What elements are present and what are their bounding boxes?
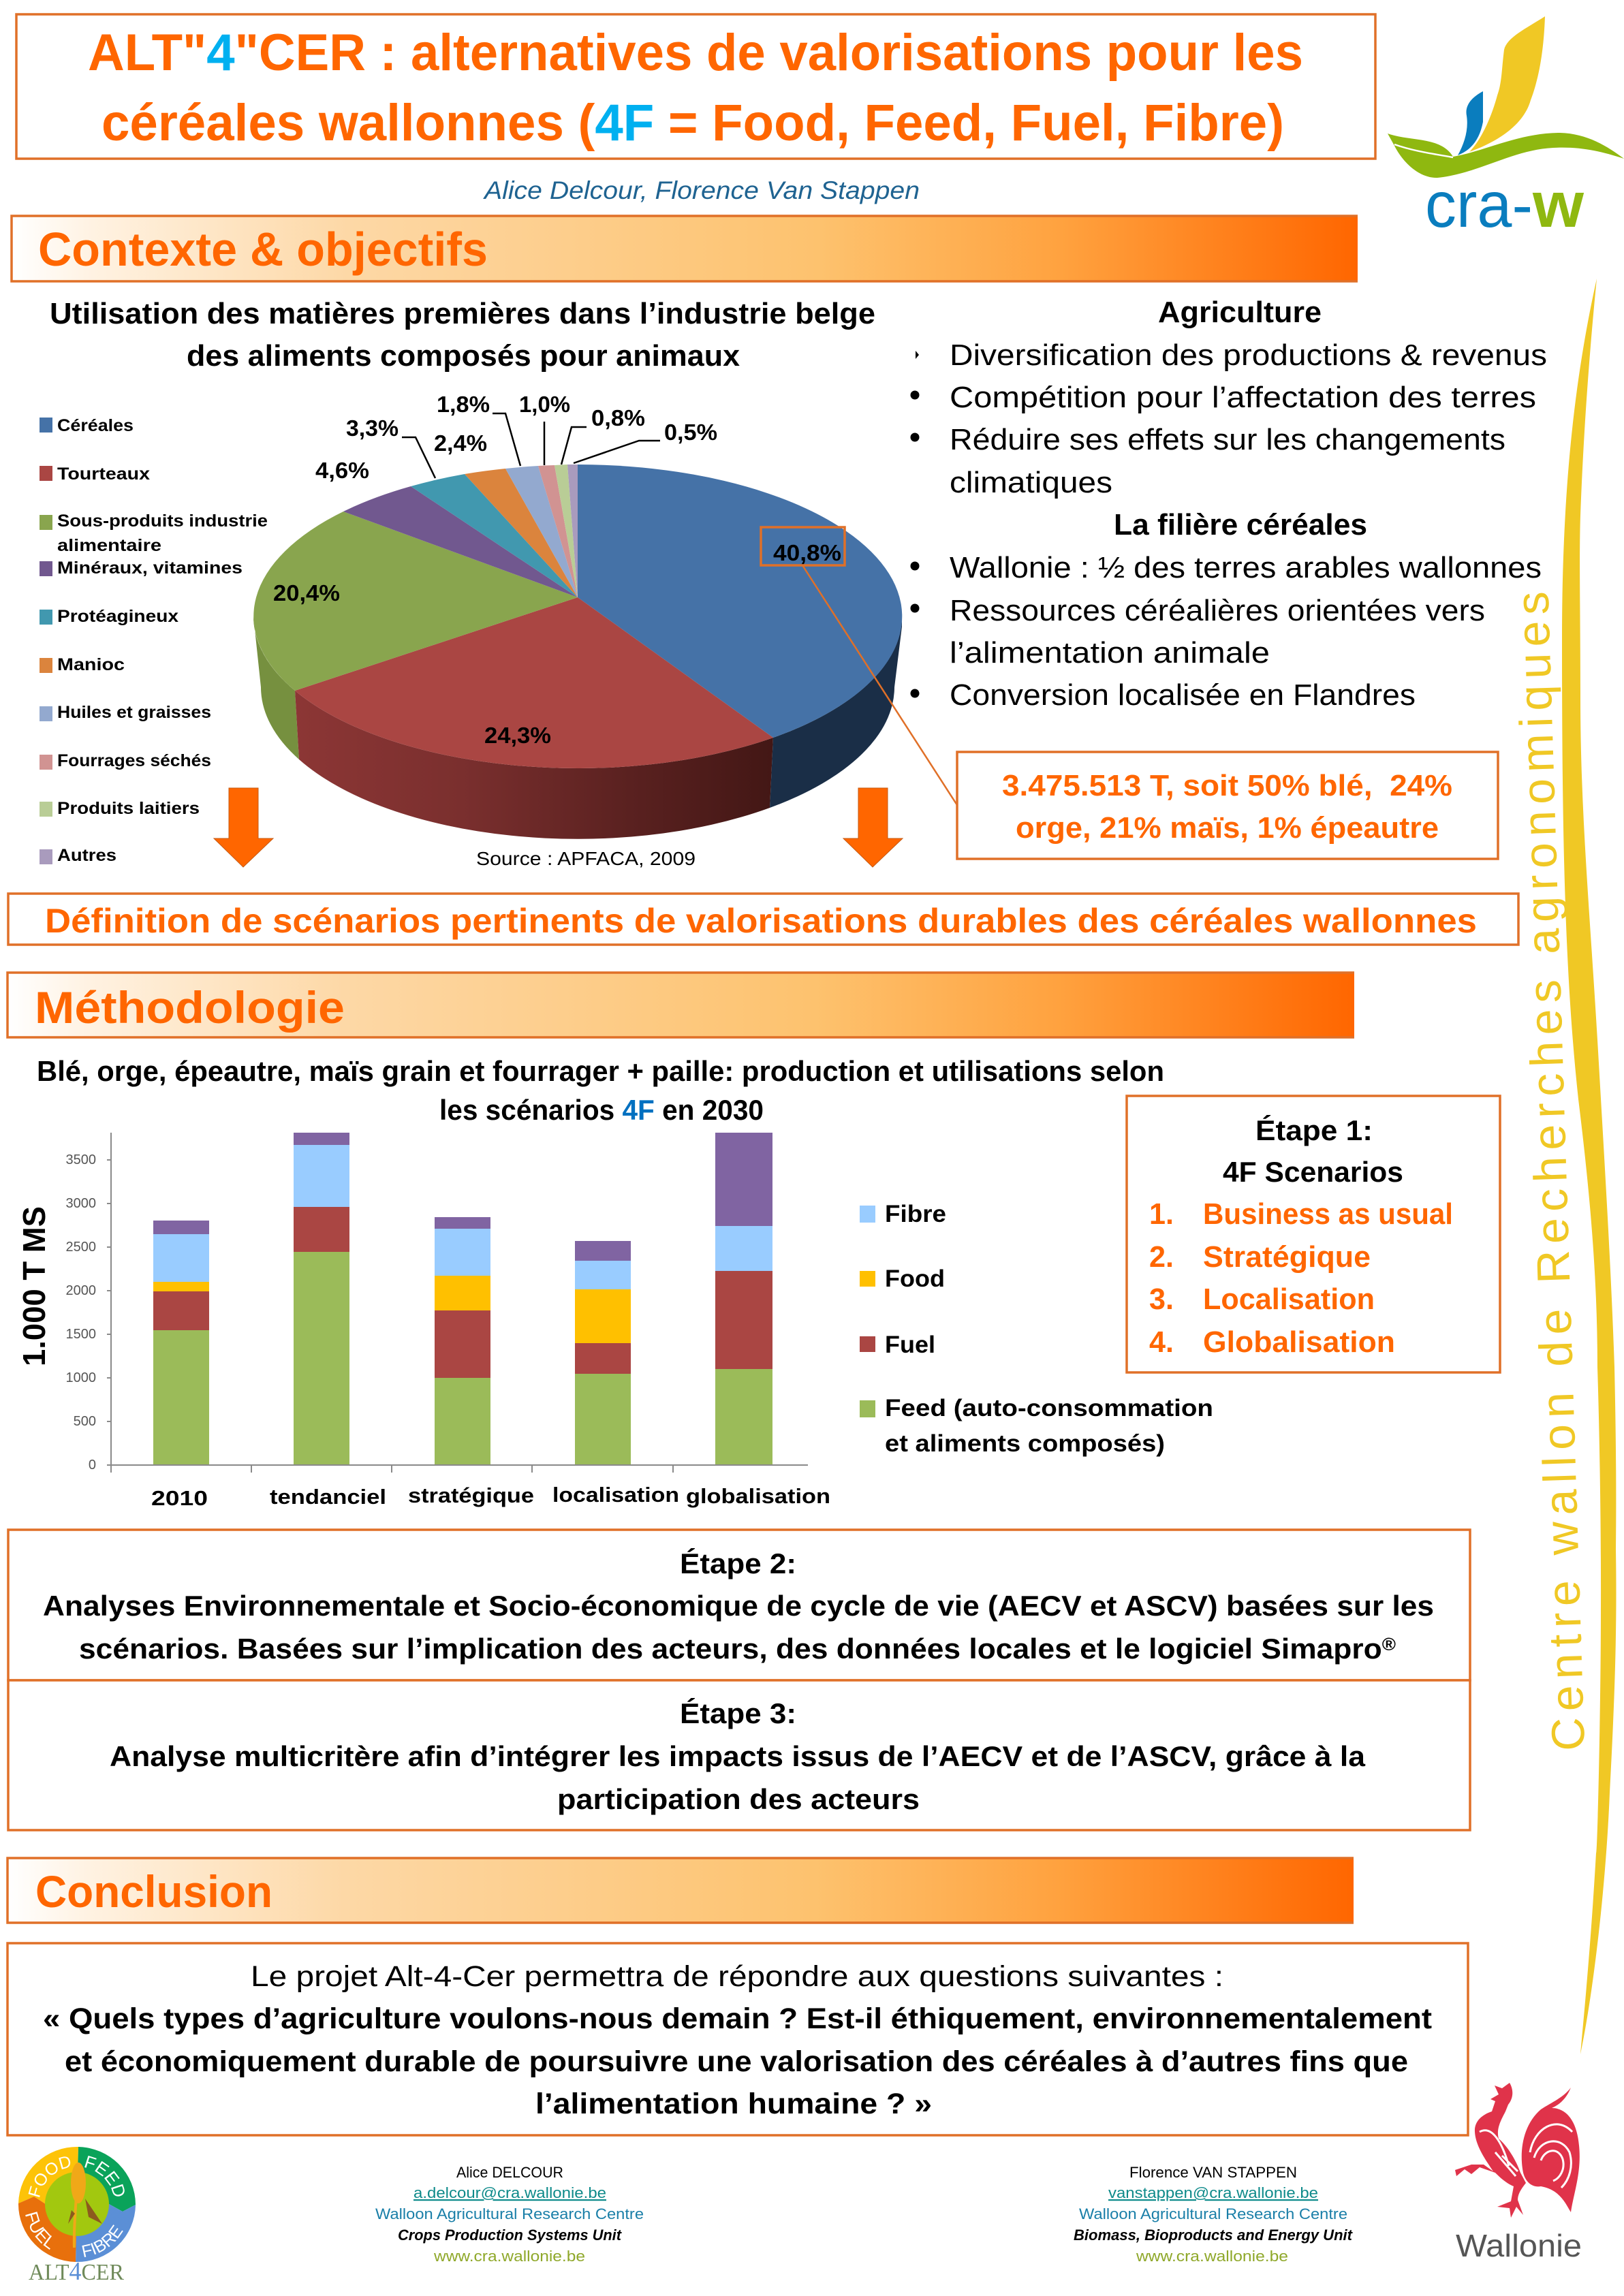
logo: alt4cer: FUEL bbox=[25, 2212, 52, 2250]
pie chart: 4,6% bbox=[315, 458, 369, 483]
pie legend: Fourrages séchés bbox=[57, 751, 211, 770]
panel: conclusion: et économiquement durable de poursuivre une valorisation des céréales à d’autres fins que bbox=[65, 2045, 1408, 2078]
panel: étape 3: participation des acteurs bbox=[557, 1783, 920, 1815]
text block: Agriculture: climatiques bbox=[950, 466, 1112, 499]
contact: Florence Van Stappen: www.cra.wallonie.be bbox=[1136, 2248, 1288, 2265]
arrow: connector to callout bbox=[802, 565, 957, 805]
pie legend: Produits laitiers bbox=[57, 799, 200, 818]
panel: étape 2: Étape 2: bbox=[680, 1547, 796, 1579]
panel: étape 1: Business as usual bbox=[1203, 1197, 1453, 1231]
x axis labels: stratégique bbox=[408, 1483, 534, 1507]
pie chart: 3,3% bbox=[346, 415, 399, 441]
highlight box: 40,8% bbox=[761, 527, 845, 565]
panel: étape 1: 2. bbox=[1149, 1240, 1174, 1274]
contact: Alice Delcour bbox=[375, 2164, 644, 2265]
bar chart legend: Feed (auto-consommation bbox=[885, 1395, 1213, 1421]
panel: étape 1: 4F Scenarios bbox=[1223, 1156, 1403, 1188]
logo: cra-w bbox=[1388, 16, 1624, 241]
section header: Méthodologie: Méthodologie bbox=[35, 982, 345, 1033]
panel: étape 1: 4. bbox=[1149, 1325, 1174, 1359]
definition banner: Définition de scénarios pertinents de valorisations durables des céréales wallonnes bbox=[45, 902, 1477, 940]
pie chart title bbox=[50, 297, 875, 373]
x axis labels: tendanciel bbox=[270, 1485, 386, 1509]
section header: Conclusion bbox=[7, 1858, 1354, 1923]
text block: Agriculture: Compétition pour l’affectation des terres bbox=[950, 381, 1536, 414]
bar chart legend: Fibre bbox=[885, 1201, 946, 1227]
panel: étape 2: Analyses Environnementale et Socio-économique de cycle de vie (AECV et ASCV) basées sur les bbox=[43, 1590, 1434, 1622]
section header: Méthodologie bbox=[7, 973, 1354, 1037]
pie chart bbox=[253, 392, 902, 839]
contact: Alice Delcour: Crops Production Systems Unit bbox=[398, 2227, 623, 2244]
pie legend: Manioc bbox=[57, 655, 125, 674]
y axis labels: 2000 bbox=[65, 1283, 96, 1298]
panel: étape 2: scénarios. Basées sur l’implication des acteurs, des données locales et le logiciel Simapro bbox=[79, 1633, 1313, 1665]
bars: 2010 bbox=[153, 1221, 209, 1465]
vertical label: Centre wallon de Recherches agronomiques: Centre wallon de Recherches agronomiques bbox=[1507, 591, 1595, 1752]
x axis labels: localisation bbox=[552, 1483, 679, 1507]
panel: étape 1 bbox=[1127, 1096, 1500, 1372]
panel: conclusion bbox=[7, 1943, 1468, 2135]
text block: La filière céréales bbox=[910, 508, 1542, 712]
pie legend: Minéraux, vitamines bbox=[57, 559, 243, 578]
contact: Florence Van Stappen: Florence VAN STAPPEN bbox=[1129, 2164, 1297, 2181]
contact: Florence Van Stappen bbox=[1074, 2164, 1354, 2265]
pie chart title: des aliments composés pour animaux bbox=[187, 339, 740, 373]
contact: Alice Delcour: a.delcour@cra.wallonie.be bbox=[413, 2184, 606, 2201]
text block: Agriculture bbox=[910, 296, 1547, 499]
x axis labels: 2010 bbox=[151, 1486, 208, 1510]
y axis labels: 1000 bbox=[65, 1370, 96, 1385]
title box bbox=[16, 14, 1375, 159]
text block: La filière céréales: Ressources céréalières orientées vers bbox=[950, 594, 1485, 627]
title box: ALT"4"CER : alternatives de valorisations pour les bbox=[88, 24, 1303, 82]
arrow: left down bbox=[214, 788, 273, 867]
panel: étape 3: Étape 3: bbox=[680, 1697, 796, 1729]
logo: Wallonie rooster bbox=[1455, 2083, 1580, 2218]
pie chart: 0,5% bbox=[664, 420, 717, 445]
contact: Florence Van Stappen: vanstappen@cra.wallonie.be bbox=[1108, 2184, 1318, 2201]
text block: La filière céréales: La filière céréales bbox=[1114, 508, 1367, 541]
logo: cra-w: cra- bbox=[1425, 169, 1533, 241]
pie chart title: Utilisation des matières premières dans l’industrie belge bbox=[50, 297, 875, 330]
bar chart legend: et aliments composés) bbox=[885, 1430, 1165, 1457]
contact: Alice Delcour: Alice DELCOUR bbox=[456, 2164, 563, 2181]
logo: alt4cer: FOOD bbox=[29, 2156, 71, 2197]
bars: tendanciel bbox=[294, 1133, 349, 1465]
wordmark: Wallonie: Wallonie bbox=[1456, 2228, 1582, 2263]
arrow: right down bbox=[843, 788, 903, 867]
y axis labels: 1500 bbox=[65, 1327, 96, 1342]
pie legend: alimentaire bbox=[57, 536, 161, 555]
logo: alt4cer: ALT4CER bbox=[29, 2257, 124, 2286]
text block: Agriculture: Réduire ses effets sur les changements bbox=[950, 423, 1505, 456]
callout: cereal tonnage bbox=[957, 752, 1498, 859]
pie chart: 2,4% bbox=[434, 430, 487, 456]
text block: Agriculture: Diversification des productions & revenus bbox=[950, 339, 1547, 372]
panel: étape 3: Analyse multicritère afin d’intégrer les impacts issus de l’AECV et de l’ASCV, grâce à la bbox=[110, 1740, 1366, 1772]
y axis labels: 3000 bbox=[65, 1196, 96, 1211]
x axis labels bbox=[151, 1483, 830, 1510]
text block: La filière céréales: Conversion localisée en Flandres bbox=[950, 678, 1416, 712]
logo: alt4cer: FEED bbox=[84, 2156, 125, 2197]
title box: céréales wallonnes (4F = Food, Feed, Fuel, Fibre) bbox=[102, 94, 1284, 152]
pie chart: 24,3% bbox=[484, 723, 551, 748]
bar chart title bbox=[37, 1055, 1164, 1126]
panel: étape 1: Stratégique bbox=[1203, 1240, 1371, 1274]
panel: étape 1: Localisation bbox=[1203, 1283, 1375, 1316]
y axis labels: 3500 bbox=[65, 1152, 96, 1167]
pie legend: Tourteaux bbox=[57, 465, 150, 484]
source: Source : APFACA, 2009 bbox=[476, 848, 696, 869]
logo: alt4cer bbox=[18, 2147, 136, 2286]
y axis labels: 2500 bbox=[65, 1240, 96, 1255]
bars: globalisation bbox=[715, 1133, 772, 1465]
y axis labels: 0 bbox=[89, 1458, 96, 1473]
pie legend: Sous-produits industrie bbox=[57, 512, 268, 531]
pie chart: 40,8% bbox=[773, 540, 841, 565]
y axis title: 1.000 T MS bbox=[16, 1206, 52, 1366]
contact: Alice Delcour: Walloon Agricultural Research Centre bbox=[375, 2205, 644, 2222]
pie chart: 20,4% bbox=[273, 580, 340, 606]
y axis labels bbox=[65, 1152, 96, 1473]
bar chart legend bbox=[860, 1201, 1213, 1457]
x axis labels: globalisation bbox=[686, 1484, 830, 1508]
text block: Agriculture: Agriculture bbox=[1158, 296, 1322, 329]
panel: étape 1: 3. bbox=[1149, 1283, 1174, 1316]
panel: étape 2 bbox=[8, 1530, 1470, 1680]
decorative swoosh bbox=[1562, 279, 1617, 2054]
panel: étape 1: 1. bbox=[1149, 1197, 1174, 1231]
text block: La filière céréales: Wallonie : ½ des terres arables wallonnes bbox=[950, 551, 1542, 584]
text block: La filière céréales: l’alimentation animale bbox=[950, 636, 1270, 670]
authors: Alice Delcour, Florence Van Stappen bbox=[483, 176, 920, 204]
definition banner bbox=[8, 894, 1518, 945]
logo: alt4cer: FIBRE bbox=[82, 2224, 123, 2257]
y axis labels: 500 bbox=[74, 1414, 96, 1429]
bar chart title: les scénarios 4F en 2030 bbox=[439, 1094, 764, 1126]
logo: cra-w: w bbox=[1532, 169, 1584, 241]
contact: Alice Delcour: www.cra.wallonie.be bbox=[433, 2248, 585, 2265]
bar chart legend: Fuel bbox=[885, 1332, 935, 1358]
panel: étape 1: Globalisation bbox=[1203, 1325, 1395, 1359]
bars: localisation bbox=[575, 1241, 631, 1465]
bar chart title: Blé, orge, épeautre, maïs grain et fourrager + paille: production et utilisations selon bbox=[37, 1055, 1164, 1087]
bar chart bbox=[16, 1133, 830, 1510]
pie chart: 1,0% bbox=[519, 392, 570, 417]
pie legend: Protéagineux bbox=[57, 607, 178, 626]
panel: étape 1: Étape 1: bbox=[1255, 1114, 1373, 1146]
panel: conclusion: « Quels types d’agriculture voulons-nous demain ? Est-il éthiquement, environnementalement bbox=[43, 2002, 1432, 2035]
pie legend: Céréales bbox=[57, 416, 134, 435]
panel: étape 2: ® bbox=[1382, 1634, 1396, 1654]
bar chart legend: Food bbox=[885, 1265, 945, 1292]
panel: conclusion: Le projet Alt-4-Cer permettra de répondre aux questions suivantes : bbox=[251, 1960, 1223, 1993]
callout: cereal tonnage: 3.475.513 T, soit 50% blé, 24% bbox=[1002, 769, 1452, 802]
section header: Contexte & objectifs bbox=[12, 216, 1358, 281]
pie chart: 0,8% bbox=[591, 405, 645, 430]
callout: cereal tonnage: orge, 21% maïs, 1% épeautre bbox=[1016, 811, 1439, 845]
pie chart: 1,8% bbox=[437, 392, 490, 417]
section header: Contexte & objectifs: Contexte & objectifs bbox=[38, 223, 488, 276]
section header: Conclusion: Conclusion bbox=[35, 1866, 272, 1917]
pie legend: Autres bbox=[57, 846, 116, 865]
bars: stratégique bbox=[435, 1217, 490, 1465]
contact: Florence Van Stappen: Biomass, Bioproducts and Energy Unit bbox=[1074, 2227, 1354, 2244]
pie legend: Huiles et graisses bbox=[57, 703, 211, 722]
pie legend bbox=[40, 416, 268, 865]
contact: Florence Van Stappen: Walloon Agricultural Research Centre bbox=[1079, 2205, 1347, 2222]
panel: étape 3 bbox=[8, 1680, 1470, 1830]
panel: conclusion: l’alimentation humaine ? » bbox=[535, 2088, 932, 2120]
